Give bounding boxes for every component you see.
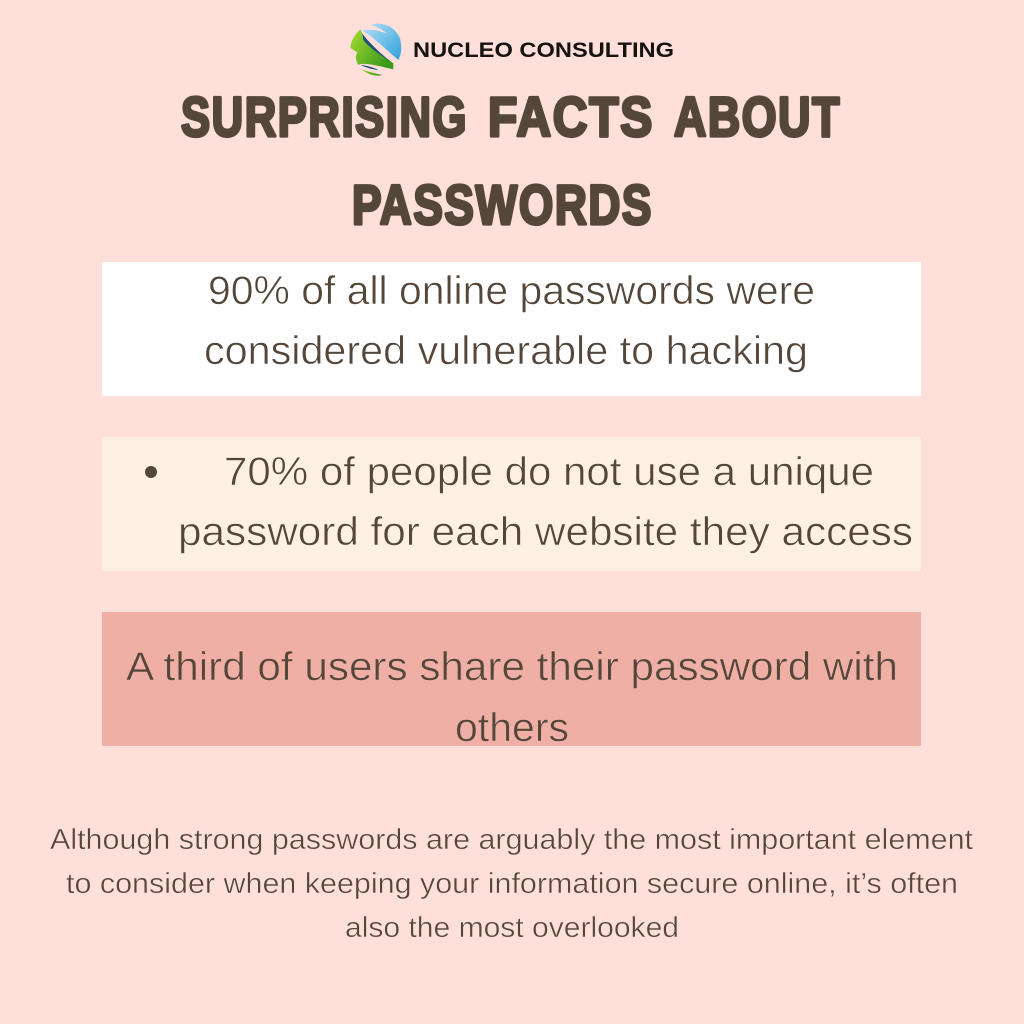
panel: fact 1: 90% of all online passwords were [208,269,815,313]
title: PASSWORDS [352,173,653,236]
panel: fact 3: A third of users share their password with [126,645,898,689]
panel: fact 3: others [455,706,569,750]
panel: fact 2 [102,437,921,571]
panel: fact 2: password for each website they access [178,510,913,554]
title: ABOUT [674,85,841,148]
closing note: also the most overlooked [345,912,679,944]
panel: fact 2: 70% of people do not use a unique [224,450,874,494]
closing note: to consider when keeping your information secure online, it’s often [66,868,958,900]
panel: fact 1: considered vulnerable to hacking [204,329,808,373]
panel: fact 3 [102,612,921,750]
title: FACTS [488,85,654,148]
title: SURPRISING [181,85,468,148]
panel: fact 1 [102,262,921,396]
logo: Nucleo Consulting [350,24,674,76]
title [181,85,841,236]
closing note: Although strong passwords are arguably the most important element [50,824,973,856]
logo wordmark: NUCLEO CONSULTING [413,39,674,62]
icon: logo globe [350,24,401,76]
closing note [50,824,973,944]
